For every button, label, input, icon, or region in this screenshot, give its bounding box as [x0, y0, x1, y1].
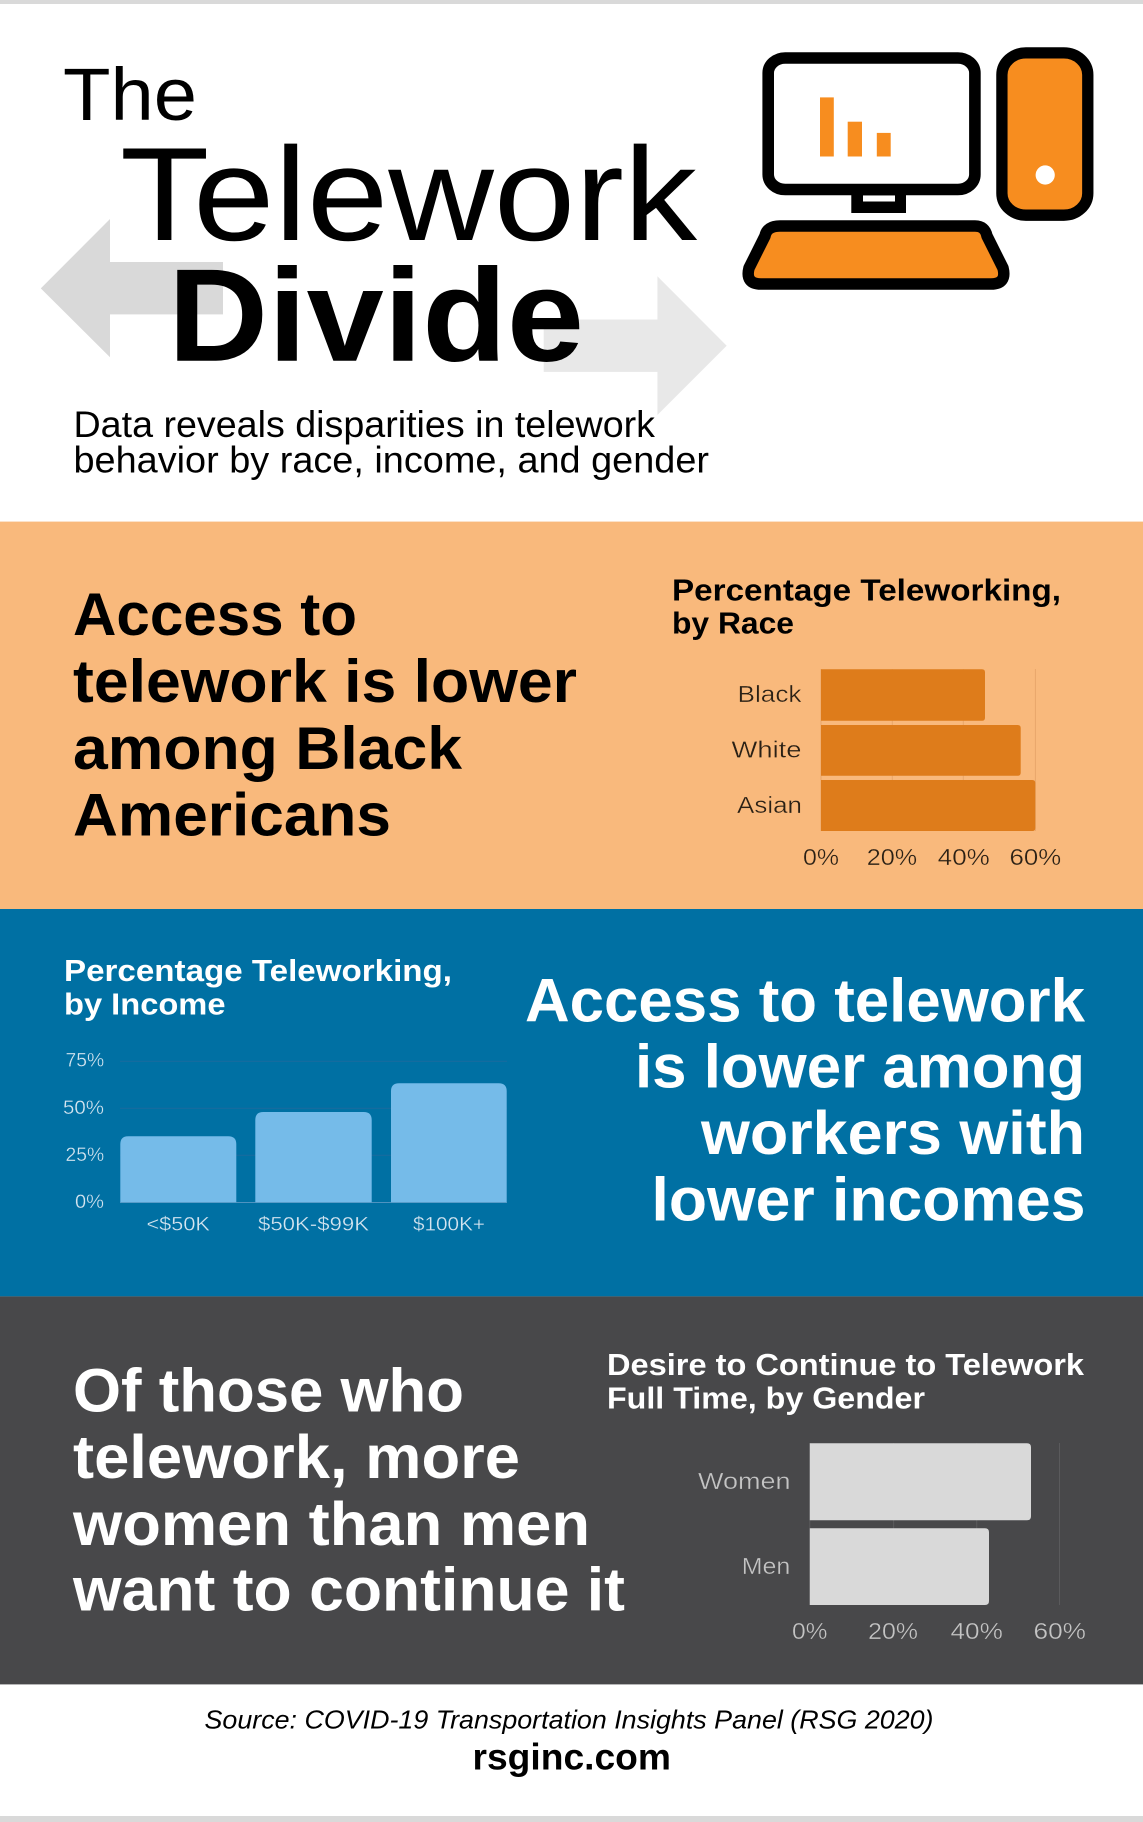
heading: race: among Black — [73, 714, 462, 782]
category labels: race: White — [732, 737, 802, 763]
title: Divide — [168, 242, 584, 389]
category labels: income: $50K-$99K — [258, 1215, 369, 1236]
website: rsginc.com — [472, 1736, 671, 1777]
axis labels: income — [63, 1051, 104, 1213]
icon: tower — [1002, 53, 1088, 215]
bar: under $50K — [120, 1136, 236, 1202]
heading: gender: want to continue it — [72, 1556, 625, 1624]
chart title: income: Percentage Teleworking, — [64, 953, 452, 988]
icon: keyboard — [748, 226, 1004, 284]
category labels: gender: Women — [698, 1468, 790, 1494]
subtitle — [74, 404, 709, 481]
title: Telework — [120, 121, 698, 269]
category labels: race: Asian — [737, 792, 802, 818]
heading: income: Access to telework — [525, 967, 1085, 1035]
heading: income — [525, 967, 1086, 1234]
category labels: gender — [698, 1468, 790, 1579]
icon: monitor — [768, 58, 975, 190]
icon: desktop computer — [748, 53, 1088, 284]
axis labels: race: 60% — [1010, 844, 1061, 870]
category labels: income: $100K+ — [413, 1215, 485, 1236]
axis labels: income: 25% — [66, 1145, 104, 1166]
subtitle: behavior by race, income, and gender — [74, 440, 709, 481]
arrow: left — [41, 219, 223, 357]
source note: Source: COVID-19 Transportation Insights Panel (RSG 2020) — [204, 1705, 933, 1735]
heading: race: Americans — [73, 780, 391, 848]
chart title: race: Percentage Teleworking, — [672, 573, 1061, 608]
panel: footer — [204, 1705, 933, 1777]
panel: header — [41, 53, 1088, 481]
category labels: race — [732, 681, 802, 818]
heading: gender — [72, 1357, 625, 1624]
category labels: income — [146, 1215, 485, 1236]
panel: income — [0, 909, 1143, 1296]
axis labels: gender: 40% — [950, 1618, 1003, 1644]
axis labels: gender — [792, 1618, 1086, 1644]
heading: race: telework is lower — [73, 647, 577, 715]
chart title: gender: Full Time, by Gender — [607, 1380, 925, 1415]
chart title: gender — [607, 1347, 1085, 1415]
bar chart: race — [732, 669, 1061, 870]
icon: monitor stand — [851, 190, 906, 213]
heading: gender: Of those who — [73, 1357, 464, 1425]
category labels: income: <$50K — [146, 1215, 210, 1236]
title — [63, 53, 698, 389]
axis labels: race — [803, 844, 1061, 870]
chart title: income: by Income — [64, 986, 226, 1021]
bar chart: income — [63, 1051, 507, 1236]
axis labels: income: 75% — [66, 1051, 104, 1072]
category labels: race: Black — [738, 681, 802, 707]
bar: Women — [810, 1443, 1031, 1520]
arrow: right — [544, 276, 727, 415]
axis labels: race: 0% — [803, 844, 839, 870]
panel: race — [0, 522, 1143, 909]
heading: race: Access to — [73, 580, 357, 648]
subtitle: Data reveals disparities in telework — [74, 404, 655, 445]
axis labels: race: 20% — [867, 844, 917, 870]
bar: Men — [810, 1528, 989, 1605]
chart title: income — [64, 953, 452, 1021]
panel: gender — [0, 1296, 1143, 1684]
axis labels: income: 50% — [63, 1098, 104, 1119]
title: The — [63, 53, 197, 136]
heading: income: lower incomes — [652, 1166, 1086, 1234]
bar: Black — [821, 669, 985, 721]
chart title: gender: Desire to Continue to Telework — [607, 1347, 1085, 1382]
bar: Asian — [821, 780, 1035, 831]
bar: $100K+ — [391, 1083, 507, 1202]
chart title: race — [672, 573, 1061, 640]
axis labels: gender: 60% — [1034, 1618, 1086, 1644]
bar chart: gender — [698, 1443, 1086, 1644]
icon: chart bars on screen — [820, 97, 891, 156]
chart title: race: by Race — [672, 605, 794, 640]
axis labels: income: 0% — [75, 1192, 104, 1213]
axis labels: race: 40% — [938, 844, 990, 870]
axis labels: gender: 20% — [868, 1618, 918, 1644]
category labels: gender: Men — [742, 1553, 790, 1579]
bar: White — [821, 725, 1021, 776]
heading: gender: women than men — [72, 1490, 590, 1558]
axis labels: gender: 0% — [792, 1618, 828, 1644]
heading: income: is lower among — [635, 1033, 1085, 1101]
heading: income: workers with — [700, 1099, 1085, 1167]
bar: $50K-$99K — [255, 1112, 372, 1202]
heading: race — [73, 580, 577, 848]
heading: gender: telework, more — [73, 1423, 520, 1491]
